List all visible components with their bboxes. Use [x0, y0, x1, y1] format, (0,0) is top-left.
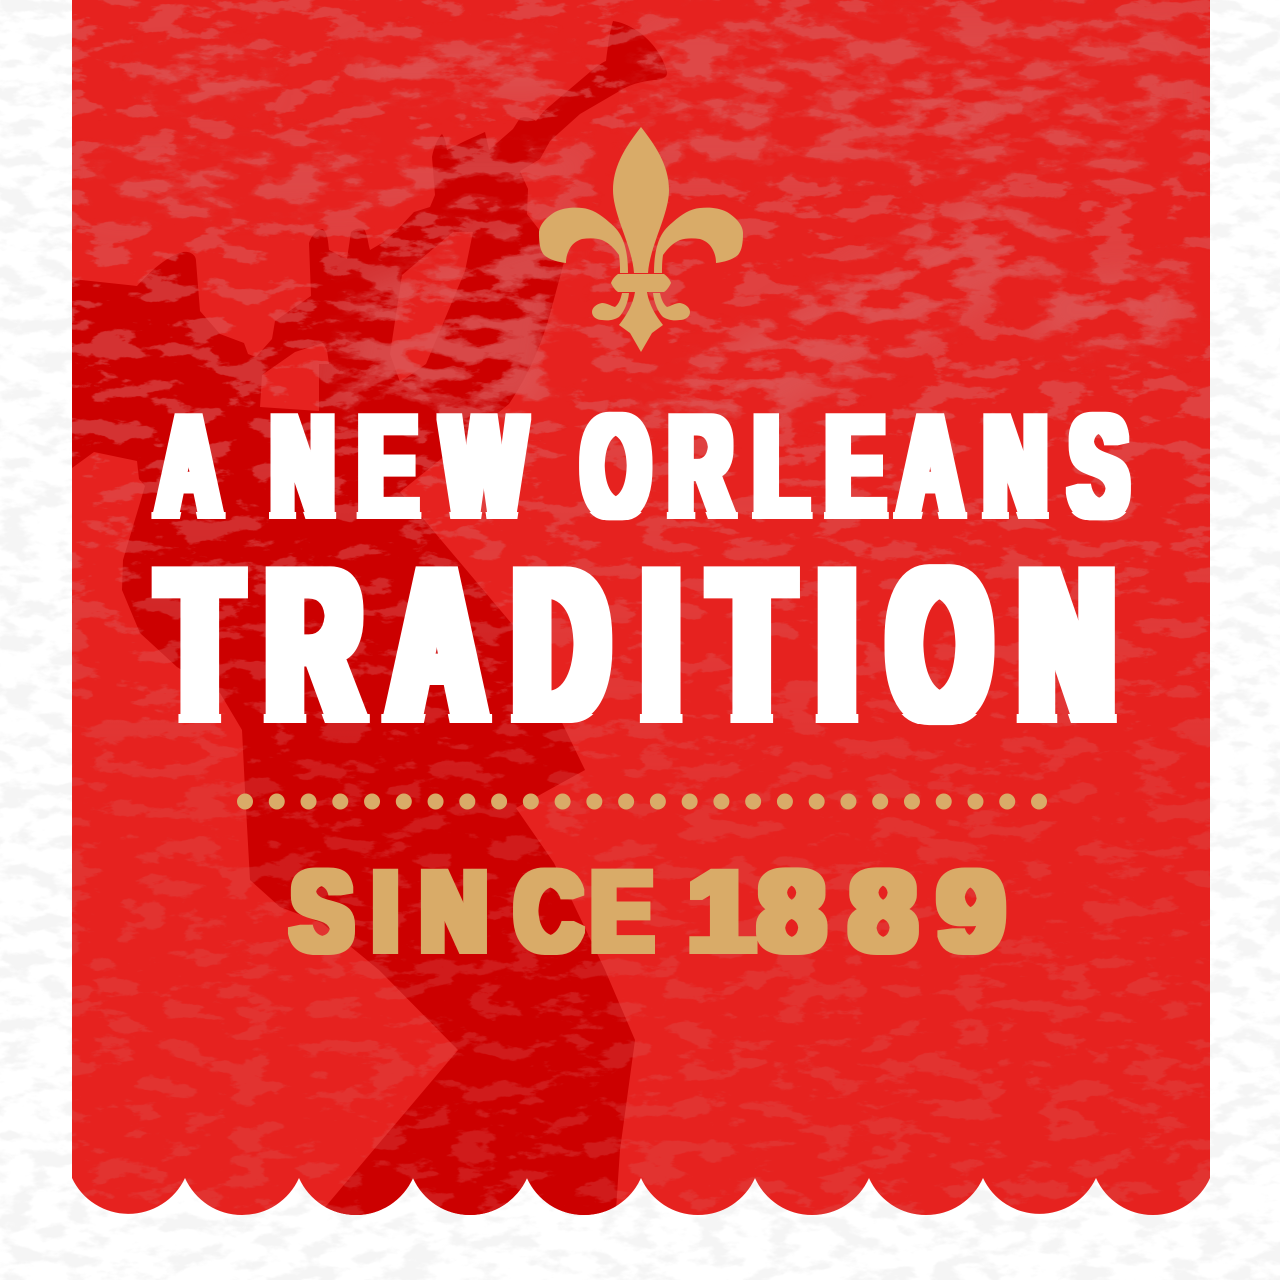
heading: TRADITION: TRADITION: [160, 524, 1114, 765]
silhouette: trumpet player: [72, 21, 667, 1225]
heading: A NEW ORLEANS: A NEW ORLEANS: [157, 386, 1128, 548]
subheading: since 1889: 1889: [688, 847, 1005, 975]
icon: fleur-de-lis: [539, 127, 743, 352]
divider: dotted line: [245, 794, 1039, 810]
subheading: since 1889: SINCE: [291, 848, 653, 976]
subheading: since 1889: [291, 847, 1005, 976]
texture: denser patches: [102, 21, 1194, 423]
